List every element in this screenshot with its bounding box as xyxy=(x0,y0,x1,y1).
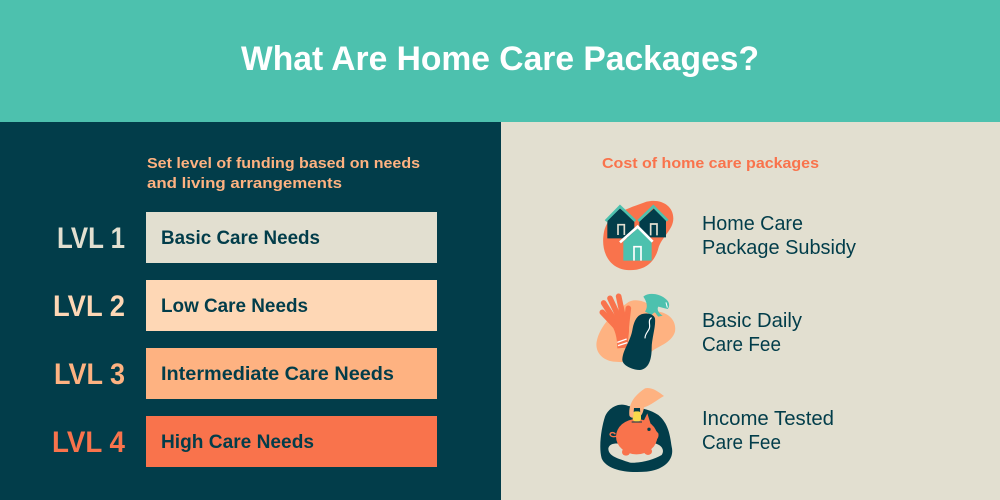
icon: houses xyxy=(603,201,673,270)
panel: funding levels xyxy=(0,122,501,500)
funding subheading xyxy=(147,155,420,192)
level 2 row xyxy=(53,280,437,331)
label: income tested care fee: Care Fee xyxy=(702,432,781,454)
label: home care package subsidy: Home Care xyxy=(702,213,803,235)
level 1 row: Basic Care Needs xyxy=(161,228,320,249)
cost heading: Cost of home care packages xyxy=(602,155,819,172)
label: basic daily care fee xyxy=(702,310,802,356)
level 1 row xyxy=(57,212,437,263)
label: income tested care fee xyxy=(702,408,834,454)
title: What Are Home Care Packages? xyxy=(241,40,759,78)
icon: glove and spray bottle xyxy=(596,294,675,370)
label: home care package subsidy: Package Subsidy xyxy=(702,237,856,259)
level 2 row: Low Care Needs xyxy=(161,296,308,317)
level 4 row: High Care Needs xyxy=(161,432,314,453)
label: basic daily care fee: Basic Daily xyxy=(702,310,802,332)
level 2 row: LVL 2 xyxy=(53,290,125,323)
level 3 row xyxy=(54,348,437,399)
level 4 row: LVL 4 xyxy=(52,426,125,459)
header band xyxy=(0,0,1000,122)
level 3 row: Intermediate Care Needs xyxy=(161,364,394,385)
label: home care package subsidy xyxy=(702,213,856,259)
funding subheading: Set level of funding based on needs xyxy=(147,155,420,172)
label: income tested care fee: Income Tested xyxy=(702,408,834,430)
icon: piggy bank xyxy=(600,388,672,472)
level 3 row: LVL 3 xyxy=(54,358,125,391)
level 1 row: LVL 1 xyxy=(57,222,125,255)
level 4 row xyxy=(52,416,437,467)
funding subheading: and living arrangements xyxy=(147,175,342,192)
label: basic daily care fee: Care Fee xyxy=(702,334,781,356)
panel: cost of home care packages xyxy=(501,122,1000,500)
